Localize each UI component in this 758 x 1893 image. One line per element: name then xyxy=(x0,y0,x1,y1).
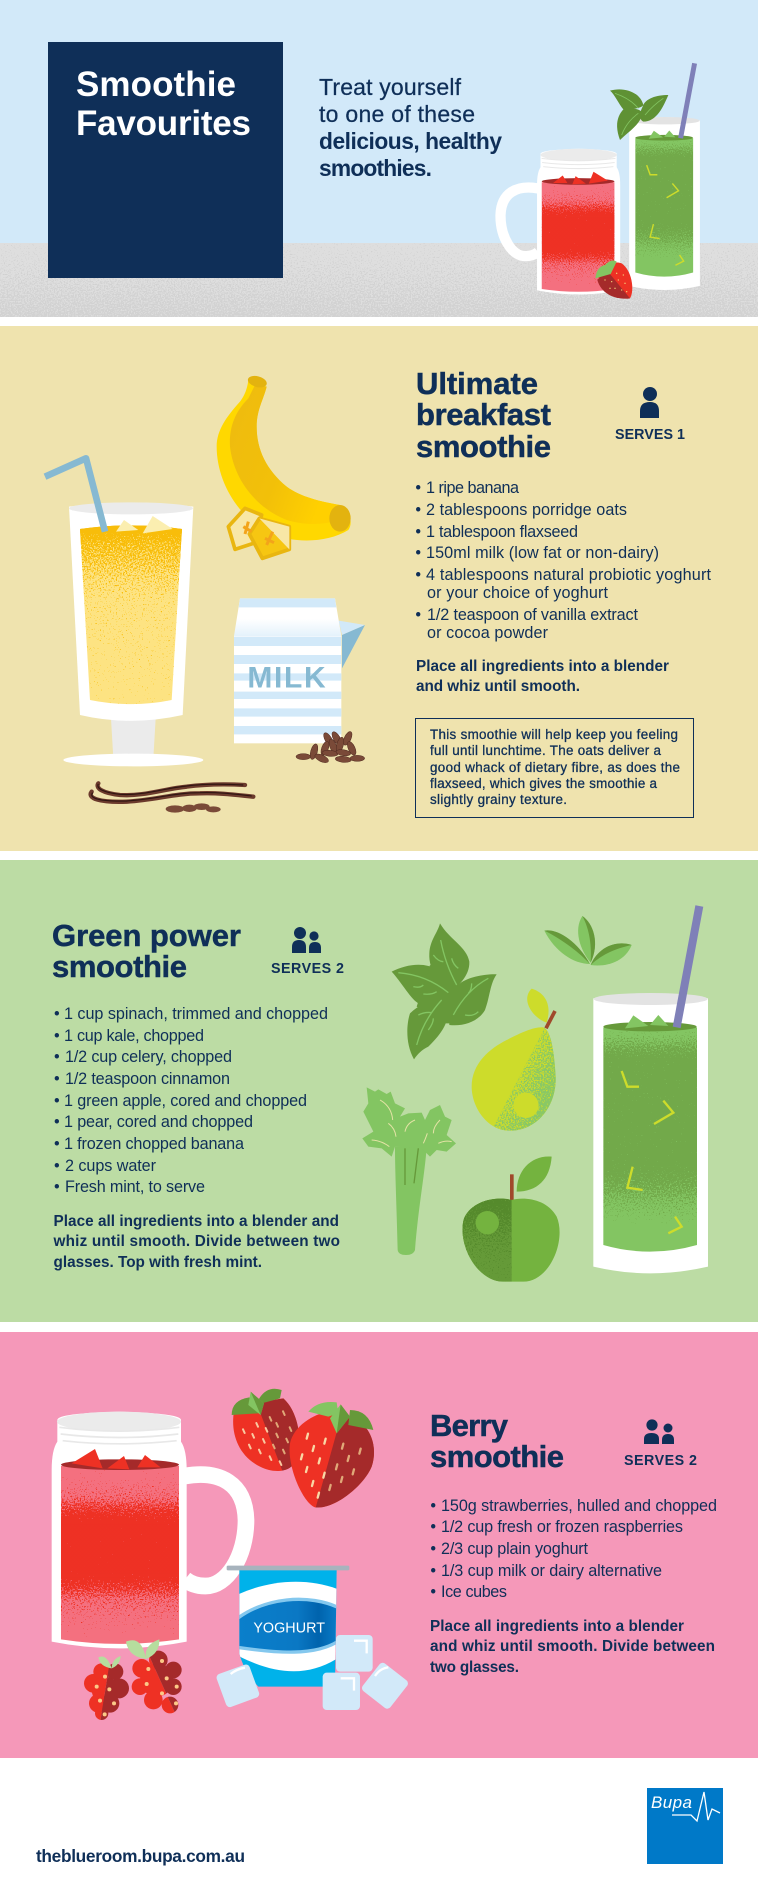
ingredients list: 150ml milk (low fat or non-dairy) xyxy=(426,544,659,562)
illustration: milk carton: MILK xyxy=(247,662,326,695)
website address: theblueroom.bupa.com.au xyxy=(36,1846,245,1866)
icon: two people xyxy=(644,1419,674,1444)
ingredients list: Ice cubes xyxy=(441,1583,507,1601)
ingredients list: 2 tablespoons porridge oats xyxy=(426,501,627,519)
heading: smoothie xyxy=(52,949,187,984)
ingredients list: • xyxy=(54,1135,60,1153)
illustration: strawberry xyxy=(595,261,632,299)
panel: green power smoothie xyxy=(0,860,758,1322)
ingredients list: 1/2 teaspoon of vanilla extract xyxy=(427,606,638,624)
icon: one person xyxy=(640,387,659,418)
icon: two people xyxy=(292,927,321,953)
intro text: Treat yourself xyxy=(319,74,462,100)
ingredients list: • xyxy=(54,1113,60,1131)
ingredients list: • xyxy=(415,501,421,519)
intro text: delicious, healthy xyxy=(319,128,502,154)
illustration: berry smoothie mug xyxy=(500,149,620,295)
ingredients list: 4 tablespoons natural probiotic yoghurt xyxy=(426,566,712,584)
intro text xyxy=(319,74,502,181)
callout: flaxseed, which gives the smoothie a xyxy=(430,776,658,791)
ingredients list xyxy=(430,1497,717,1601)
heading: Berry xyxy=(430,1408,509,1443)
method: whiz until smooth. Divide between two xyxy=(52,1233,340,1250)
ingredients list: • xyxy=(415,566,421,584)
serves label: SERVES 2 xyxy=(624,1453,697,1469)
ingredients list: • xyxy=(415,606,421,624)
logo: Bupa xyxy=(647,1788,723,1864)
callout: slightly grainy texture. xyxy=(430,792,567,807)
footer xyxy=(36,1788,723,1866)
ingredients list: 1 frozen chopped banana xyxy=(64,1135,244,1153)
ingredients list: • xyxy=(54,1178,60,1196)
illustration: breakfast smoothie glass xyxy=(45,458,203,766)
illustration: celery xyxy=(362,1087,456,1255)
illustration: green smoothie glass xyxy=(593,906,708,1273)
callout: good whack of dietary fibre, as does the xyxy=(430,760,680,775)
ingredients list xyxy=(54,1005,328,1196)
method: two glasses. xyxy=(430,1659,519,1676)
method: and whiz until smooth. xyxy=(416,678,580,695)
ingredients list: 2 cups water xyxy=(65,1157,157,1175)
heading xyxy=(416,366,551,464)
ingredients list: • xyxy=(54,1005,60,1023)
ingredients list: • xyxy=(54,1157,60,1175)
illustration: berry smoothie mug xyxy=(52,1412,246,1648)
illustration: mint leaves xyxy=(610,89,668,140)
ingredients list: 1 cup spinach, trimmed and chopped xyxy=(64,1005,328,1023)
serves label: SERVES 2 xyxy=(271,961,344,977)
ingredients list: • xyxy=(54,1048,60,1066)
logo: Bupa: Bupa xyxy=(651,1793,692,1812)
heading xyxy=(52,918,241,984)
illustration: spinach leaves xyxy=(392,923,497,1059)
illustration: raspberries xyxy=(84,1639,182,1720)
ingredients list: 1/2 teaspoon cinnamon xyxy=(65,1070,230,1088)
method xyxy=(52,1213,340,1271)
illustration: flaxseed xyxy=(296,730,365,764)
title block: Favourites xyxy=(76,104,251,143)
title block xyxy=(48,42,283,278)
heading: breakfast xyxy=(416,397,551,432)
illustration: banana xyxy=(217,374,351,558)
method: Place all ingredients into a blender xyxy=(430,1618,684,1635)
intro text: smoothies. xyxy=(319,155,432,181)
method xyxy=(416,658,669,695)
ingredients list: • xyxy=(430,1540,436,1558)
ingredients list: • xyxy=(415,544,421,562)
illustration: yoghurt pot: YOGHURT xyxy=(253,1620,325,1636)
ingredients list: 150g strawberries, hulled and chopped xyxy=(441,1497,717,1515)
ingredients list: 1 green apple, cored and chopped xyxy=(64,1092,307,1110)
illustration: vanilla pods and beans xyxy=(91,783,253,813)
ingredients list: • xyxy=(54,1027,60,1045)
heading: Ultimate xyxy=(416,366,538,401)
ingredients list: 1 pear, cored and chopped xyxy=(64,1113,253,1131)
heading xyxy=(430,1408,564,1474)
illustration: green smoothie glass xyxy=(629,63,700,290)
ingredients list: 1/2 cup celery, chopped xyxy=(65,1048,232,1066)
title block: Smoothie xyxy=(76,65,236,104)
method: Place all ingredients into a blender xyxy=(416,658,669,675)
method: and whiz until smooth. Divide between xyxy=(430,1638,715,1655)
panel: ultimate breakfast smoothie xyxy=(0,326,758,851)
ingredients list: 1 ripe banana xyxy=(426,479,519,497)
illustration: strawberries xyxy=(232,1389,374,1508)
ingredients list: • xyxy=(430,1497,436,1515)
heading: smoothie xyxy=(416,429,551,464)
illustration: apple xyxy=(457,1157,560,1283)
serves label: SERVES 1 xyxy=(615,427,685,443)
ingredients list: • xyxy=(415,479,421,497)
ingredients list: 1 tablespoon flaxseed xyxy=(426,523,578,541)
illustration: yoghurt pot xyxy=(227,1566,349,1687)
heading: Green power xyxy=(52,918,241,953)
ingredients list: • xyxy=(430,1562,436,1580)
callout xyxy=(416,718,694,818)
callout: full until lunchtime. The oats deliver a xyxy=(430,743,662,758)
heading: smoothie xyxy=(430,1439,564,1474)
panel: header xyxy=(0,0,758,317)
ingredients list xyxy=(415,479,712,642)
ingredients list: 1 cup kale, chopped xyxy=(64,1027,204,1045)
callout: This smoothie will help keep you feeling xyxy=(430,727,678,742)
ingredients list: • xyxy=(430,1583,436,1601)
table surface xyxy=(0,243,758,317)
ingredients list: or cocoa powder xyxy=(427,624,549,642)
ingredients list: • xyxy=(54,1092,60,1110)
panel: berry smoothie xyxy=(0,1332,758,1758)
illustration: pear xyxy=(472,989,560,1133)
illustration: mint leaves xyxy=(544,916,632,966)
ingredients list: • xyxy=(415,523,421,541)
illustration: milk carton xyxy=(234,598,365,743)
ingredients list: or your choice of yoghurt xyxy=(427,584,608,602)
method: Place all ingredients into a blender and xyxy=(54,1213,339,1230)
ingredients list: Fresh mint, to serve xyxy=(65,1178,205,1196)
ingredients list: • xyxy=(430,1518,436,1536)
ingredients list: 2/3 cup plain yoghurt xyxy=(441,1540,588,1558)
method: glasses. Top with fresh mint. xyxy=(54,1254,262,1271)
ingredients list: • xyxy=(54,1070,60,1088)
method xyxy=(430,1618,715,1676)
ingredients list: 1/3 cup milk or dairy alternative xyxy=(441,1562,662,1580)
illustration: ice cubes xyxy=(215,1635,410,1710)
intro text: to one of these xyxy=(319,101,475,127)
ingredients list: 1/2 cup fresh or frozen raspberries xyxy=(441,1518,683,1536)
